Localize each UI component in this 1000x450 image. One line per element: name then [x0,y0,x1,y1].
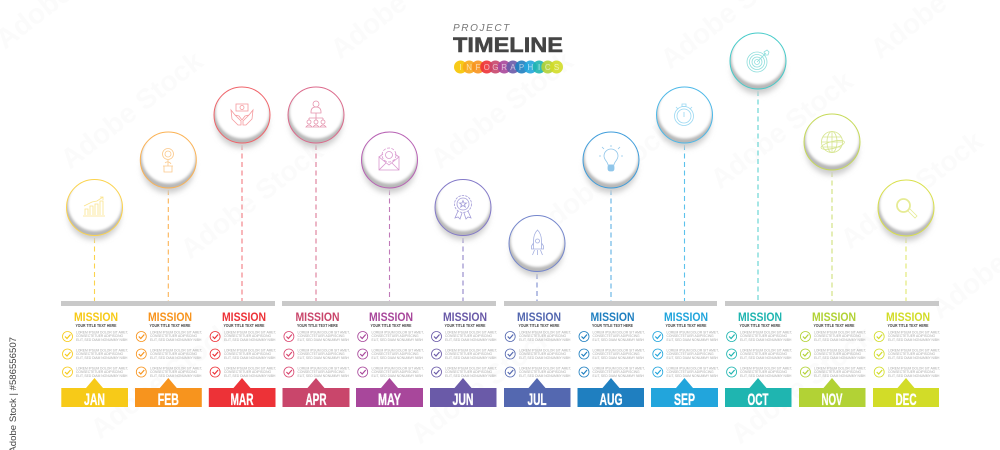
month tab [799,378,866,409]
checklist: LOREM IPSUM DOLOR SIT AMET, [445,348,497,352]
milestone: June [430,177,497,409]
checklist: ELIT, SED DIAM NONUMMY NIBH [888,374,940,378]
text: Adobe Stock [55,45,209,175]
month tab: JUN [452,390,474,409]
month tab [873,378,939,409]
month text: YOUR TITLE TEXT HERE [224,323,265,328]
checklist: LOREM IPSUM DOLOR SIT AMET, [445,330,497,334]
checklist: CONSECTETUER ADIPISCING [298,352,345,356]
checklist: ELIT, SED DIAM NONUMMY NIBH [814,374,866,378]
infographics colored dots: P [519,63,524,72]
checklist [727,330,792,378]
milestone: July [504,213,571,409]
checklist: LOREM IPSUM DOLOR SIT AMET, [372,330,424,334]
checklist [874,330,940,378]
month text: MISSION [812,311,856,324]
checklist: LOREM IPSUM DOLOR SIT AMET, [76,366,128,370]
checklist: CONSECTETUER ADIPISCING [592,352,640,356]
checklist: CONSECTETUER ADIPISCING [740,334,788,338]
checklist [62,330,128,378]
checklist: LOREM IPSUM DOLOR SIT AMET, [592,348,645,352]
circle node [288,84,344,148]
milestone: August [578,130,645,409]
month text: YOUR TITLE TEXT HERE [888,323,929,328]
checklist: ELIT, SED DIAM NONUMMY NIBH [666,374,719,378]
month text: MISSION [296,311,340,324]
text: Adobe Stock [175,135,329,265]
checklist: CONSECTETUER ADIPISCING [76,352,124,356]
dashed connector [462,238,464,301]
month tab [430,378,496,409]
checklist: ELIT, SED DIAM NONUMMY NIBH [76,338,128,342]
month text: MISSION [886,311,930,324]
checklist: CONSECTETUER ADIPISCING [519,352,567,356]
milestone: April [282,84,350,409]
icon: globe [820,132,845,152]
dashed connector [315,145,317,301]
infographics colored dots [454,60,563,74]
checklist: LOREM IPSUM DOLOR SIT AMET, [224,348,276,352]
month text: MISSION [222,311,266,324]
infographics colored dots: I [459,63,462,72]
month tab: MAR [230,390,254,409]
checklist: LOREM IPSUM DOLOR SIT AMET, [740,366,792,370]
month tab [504,378,570,409]
checklist [358,330,424,378]
checklist: ELIT, SED DIAM NONUMMY NIBH [666,338,719,342]
checklist: LOREM IPSUM DOLOR SIT AMET, [298,366,350,370]
circle node [66,177,122,240]
dashed connector [241,145,243,301]
checklist: ELIT, SED DIAM NONUMMY NIBH [76,374,128,378]
circle node [583,130,639,193]
circle node [730,30,786,94]
text: Adobe Stock [835,125,989,255]
checklist: CONSECTETUER ADIPISCING [888,370,936,374]
checklist: LOREM IPSUM DOLOR SIT AMET, [224,366,276,370]
checklist: LOREM IPSUM DOLOR SIT AMET, [814,330,866,334]
checklist: ELIT, SED DIAM NONUMMY NIBH [814,338,866,342]
month text: YOUR TITLE TEXT HERE [444,323,486,328]
checklist: ELIT, SED DIAM NONUMMY NIBH [224,356,276,360]
checklist: CONSECTETUER ADIPISCING [592,370,640,374]
checklist: LOREM IPSUM DOLOR SIT AMET, [666,366,719,370]
infographics colored dots: N [466,63,472,72]
month tab: FEB [158,390,179,409]
checklist: CONSECTETUER ADIPISCING [372,334,419,338]
checklist [505,330,571,378]
checklist [210,330,276,378]
infographics colored dots: A [510,63,516,72]
checklist: LOREM IPSUM DOLOR SIT AMET, [372,348,424,352]
checklist: LOREM IPSUM DOLOR SIT AMET, [224,330,276,334]
checklist: CONSECTETUER ADIPISCING [298,334,345,338]
milestone: December [873,178,940,409]
icon: award ribbon [454,196,472,219]
month tab [209,378,276,409]
checklist: LOREM IPSUM DOLOR SIT AMET, [298,330,350,334]
month tab [651,378,718,409]
month tab: DEC [896,390,916,409]
month tab: NOV [822,390,843,409]
checklist: CONSECTETUER ADIPISCING [666,352,714,356]
checklist: ELIT, SED DIAM NONUMMY NIBH [372,356,424,360]
checklist: LOREM IPSUM DOLOR SIT AMET, [592,330,645,334]
infographics colored dots: I [538,63,540,72]
checklist: LOREM IPSUM DOLOR SIT AMET, [592,366,645,370]
text: Adobe Stock [85,315,239,445]
stock image credit: Adobe Stock | #586556507 [8,337,19,450]
month text: MISSION [369,311,413,324]
checklist: CONSECTETUER ADIPISCING [372,352,419,356]
checklist: LOREM IPSUM DOLOR SIT AMET, [888,348,940,352]
infographics colored dots: S [554,63,559,72]
month text: YOUR TITLE TEXT HERE [150,323,191,328]
month tab: JUL [528,390,546,409]
checklist: LOREM IPSUM DOLOR SIT AMET, [814,348,866,352]
checklist: CONSECTETUER ADIPISCING [592,334,640,338]
checklist [284,330,350,378]
circle node [878,178,934,241]
checklist: ELIT, SED DIAM NONUMMY NIBH [519,374,571,378]
checklist: LOREM IPSUM DOLOR SIT AMET, [888,366,940,370]
checklist: ELIT, SED DIAM NONUMMY NIBH [740,374,792,378]
checklist: LOREM IPSUM DOLOR SIT AMET, [150,366,202,370]
checklist: CONSECTETUER ADIPISCING [372,370,419,374]
checklist: ELIT, SED DIAM NONUMMY NIBH [445,374,497,378]
month text: MISSION [517,311,561,324]
icon: light bulb [599,145,623,171]
checklist: LOREM IPSUM DOLOR SIT AMET, [76,330,128,334]
month text: YOUR TITLE TEXT HERE [76,323,117,328]
dashed connector [831,172,833,301]
month tab: AUG [600,390,622,409]
month tab [356,378,423,409]
checklist: CONSECTETUER ADIPISCING [519,334,567,338]
checklist: CONSECTETUER ADIPISCING [740,352,788,356]
dashed connector [388,190,390,301]
text: Adobe Stock [525,115,679,245]
infographics colored dots: O [484,63,490,72]
checklist: LOREM IPSUM DOLOR SIT AMET, [519,330,571,334]
checklist: LOREM IPSUM DOLOR SIT AMET, [740,330,792,334]
checklist: CONSECTETUER ADIPISCING [814,370,862,374]
checklist: CONSECTETUER ADIPISCING [666,370,714,374]
month text: MISSION [664,311,708,324]
text: Adobe Stock [405,320,559,450]
checklist: ELIT, SED DIAM NONUMMY NIBH [224,374,276,378]
month text: YOUR TITLE TEXT HERE [297,323,338,328]
month text: MISSION [148,311,192,324]
dashed connector [905,238,907,301]
milestone: February [135,130,202,409]
dashed connector [536,274,538,301]
month tab [725,378,792,409]
month text: YOUR TITLE TEXT HERE [518,323,560,328]
month text: MISSION [738,311,782,324]
checklist: ELIT, SED DIAM NONUMMY NIBH [519,338,571,342]
checklist: CONSECTETUER ADIPISCING [740,370,788,374]
checklist: CONSECTETUER ADIPISCING [445,370,493,374]
month text: YOUR TITLE TEXT HERE [592,323,633,328]
dashed connector [610,190,612,301]
checklist: CONSECTETUER ADIPISCING [150,352,198,356]
checklist: ELIT, SED DIAM NONUMMY NIBH [519,356,571,360]
checklist: ELIT, SED DIAM NONUMMY NIBH [445,338,497,342]
milestone: November [799,112,866,409]
text: Adobe Stock [705,65,859,195]
checklist: LOREM IPSUM DOLOR SIT AMET, [888,330,940,334]
checklist: ELIT, SED DIAM NONUMMY NIBH [888,338,940,342]
checklist: CONSECTETUER ADIPISCING [150,334,198,338]
icon: target with dart [747,50,769,72]
dashed connector [684,145,686,301]
checklist: ELIT, SED DIAM NONUMMY NIBH [298,356,350,360]
checklist: LOREM IPSUM DOLOR SIT AMET, [519,348,571,352]
checklist [800,330,866,378]
month text: YOUR TITLE TEXT HERE [370,323,412,328]
circle node [804,112,860,175]
checklist: CONSECTETUER ADIPISCING [224,352,272,356]
icon: envelope with gear [379,148,399,170]
checklist: CONSECTETUER ADIPISCING [298,370,345,374]
checklist: ELIT, SED DIAM NONUMMY NIBH [298,374,350,378]
month text: YOUR TITLE TEXT HERE [814,323,855,328]
checklist: LOREM IPSUM DOLOR SIT AMET, [814,366,866,370]
checklist: CONSECTETUER ADIPISCING [814,334,862,338]
checklist: LOREM IPSUM DOLOR SIT AMET, [150,330,202,334]
checklist: ELIT, SED DIAM NONUMMY NIBH [592,356,645,360]
month tab [282,378,350,409]
checklist: CONSECTETUER ADIPISCING [445,352,493,356]
icon: team hierarchy [306,101,326,127]
milestone: January [61,177,128,409]
checklist: CONSECTETUER ADIPISCING [888,352,936,356]
checklist: ELIT, SED DIAM NONUMMY NIBH [666,356,719,360]
text: Adobe Stock [425,45,579,175]
checklist: CONSECTETUER ADIPISCING [519,370,567,374]
checklist: ELIT, SED DIAM NONUMMY NIBH [814,356,866,360]
checklist: CONSECTETUER ADIPISCING [224,370,272,374]
infographics colored dots: F [476,63,481,72]
checklist: ELIT, SED DIAM NONUMMY NIBH [592,374,645,378]
checklist: CONSECTETUER ADIPISCING [76,370,124,374]
icon: rocket [532,230,544,255]
checklist [653,330,719,378]
month text: MISSION [443,311,487,324]
month tab [135,378,202,409]
icon: stopwatch [674,104,694,126]
infographics colored dots: C [545,63,551,72]
checklist: CONSECTETUER ADIPISCING [445,334,493,338]
circle node [656,84,712,148]
checklist: ELIT, SED DIAM NONUMMY NIBH [740,338,792,342]
checklist: ELIT, SED DIAM NONUMMY NIBH [888,356,940,360]
month text: MISSION [74,311,118,324]
month tab: OCT [748,390,769,409]
checklist: CONSECTETUER ADIPISCING [150,370,198,374]
checklist: ELIT, SED DIAM NONUMMY NIBH [372,338,424,342]
checklist: ELIT, SED DIAM NONUMMY NIBH [298,338,350,342]
checklist: ELIT, SED DIAM NONUMMY NIBH [224,338,276,342]
circle node [509,213,565,276]
text: Adobe Stock [725,320,879,450]
month text: MISSION [590,311,634,324]
milestone: September [651,84,719,409]
circle node [214,84,270,148]
checklist: CONSECTETUER ADIPISCING [76,334,124,338]
checklist: LOREM IPSUM DOLOR SIT AMET, [298,348,350,352]
month tab [578,378,644,409]
checklist: ELIT, SED DIAM NONUMMY NIBH [150,338,202,342]
milestone: October [725,30,792,409]
circle node [140,130,196,193]
checklist: ELIT, SED DIAM NONUMMY NIBH [592,338,645,342]
checklist [579,330,645,378]
month tab: SEP [674,390,695,409]
infographics colored dots: H [528,63,534,72]
checklist: ELIT, SED DIAM NONUMMY NIBH [445,356,497,360]
checklist: CONSECTETUER ADIPISCING [888,334,936,338]
milestone: March [209,84,276,409]
checklist: LOREM IPSUM DOLOR SIT AMET, [150,348,202,352]
checklist: ELIT, SED DIAM NONUMMY NIBH [740,356,792,360]
month tab: APR [306,390,326,409]
checklist: ELIT, SED DIAM NONUMMY NIBH [76,356,128,360]
checklist: LOREM IPSUM DOLOR SIT AMET, [666,330,719,334]
milestone: May [356,130,424,409]
checklist [136,330,202,378]
checklist: LOREM IPSUM DOLOR SIT AMET, [519,366,571,370]
title: project timeline [453,23,563,74]
icon: hands with money [231,104,253,125]
month tab: MAY [378,390,401,409]
checklist: CONSECTETUER ADIPISCING [814,352,862,356]
dashed connector [94,238,96,301]
checklist: LOREM IPSUM DOLOR SIT AMET, [445,366,497,370]
checklist: LOREM IPSUM DOLOR SIT AMET, [372,366,424,370]
month text: YOUR TITLE TEXT HERE [666,323,707,328]
checklist: CONSECTETUER ADIPISCING [666,334,714,338]
dashed connector [167,190,169,301]
icon: growth chart [83,197,105,216]
month text: YOUR TITLE TEXT HERE [740,323,781,328]
timeline bar [61,301,939,306]
circle node [362,130,418,193]
checklist: LOREM IPSUM DOLOR SIT AMET, [666,348,719,352]
month tab [61,378,128,409]
checklist: ELIT, SED DIAM NONUMMY NIBH [372,374,424,378]
heading: timeline: TIMELINE [453,33,563,57]
month tab: JAN [84,390,105,409]
checklist: ELIT, SED DIAM NONUMMY NIBH [150,356,202,360]
checklist: CONSECTETUER ADIPISCING [224,334,272,338]
icon: money plant [162,148,174,172]
checklist: LOREM IPSUM DOLOR SIT AMET, [76,348,128,352]
checklist: LOREM IPSUM DOLOR SIT AMET, [740,348,792,352]
checklist [432,330,497,378]
heading: project: PROJECT [453,23,511,34]
infographics colored dots: G [492,63,499,72]
dashed connector [757,91,759,301]
infographics colored dots: R [501,63,507,72]
icon: magnifier [897,199,917,218]
checklist: ELIT, SED DIAM NONUMMY NIBH [150,374,202,378]
circle node [435,177,491,240]
